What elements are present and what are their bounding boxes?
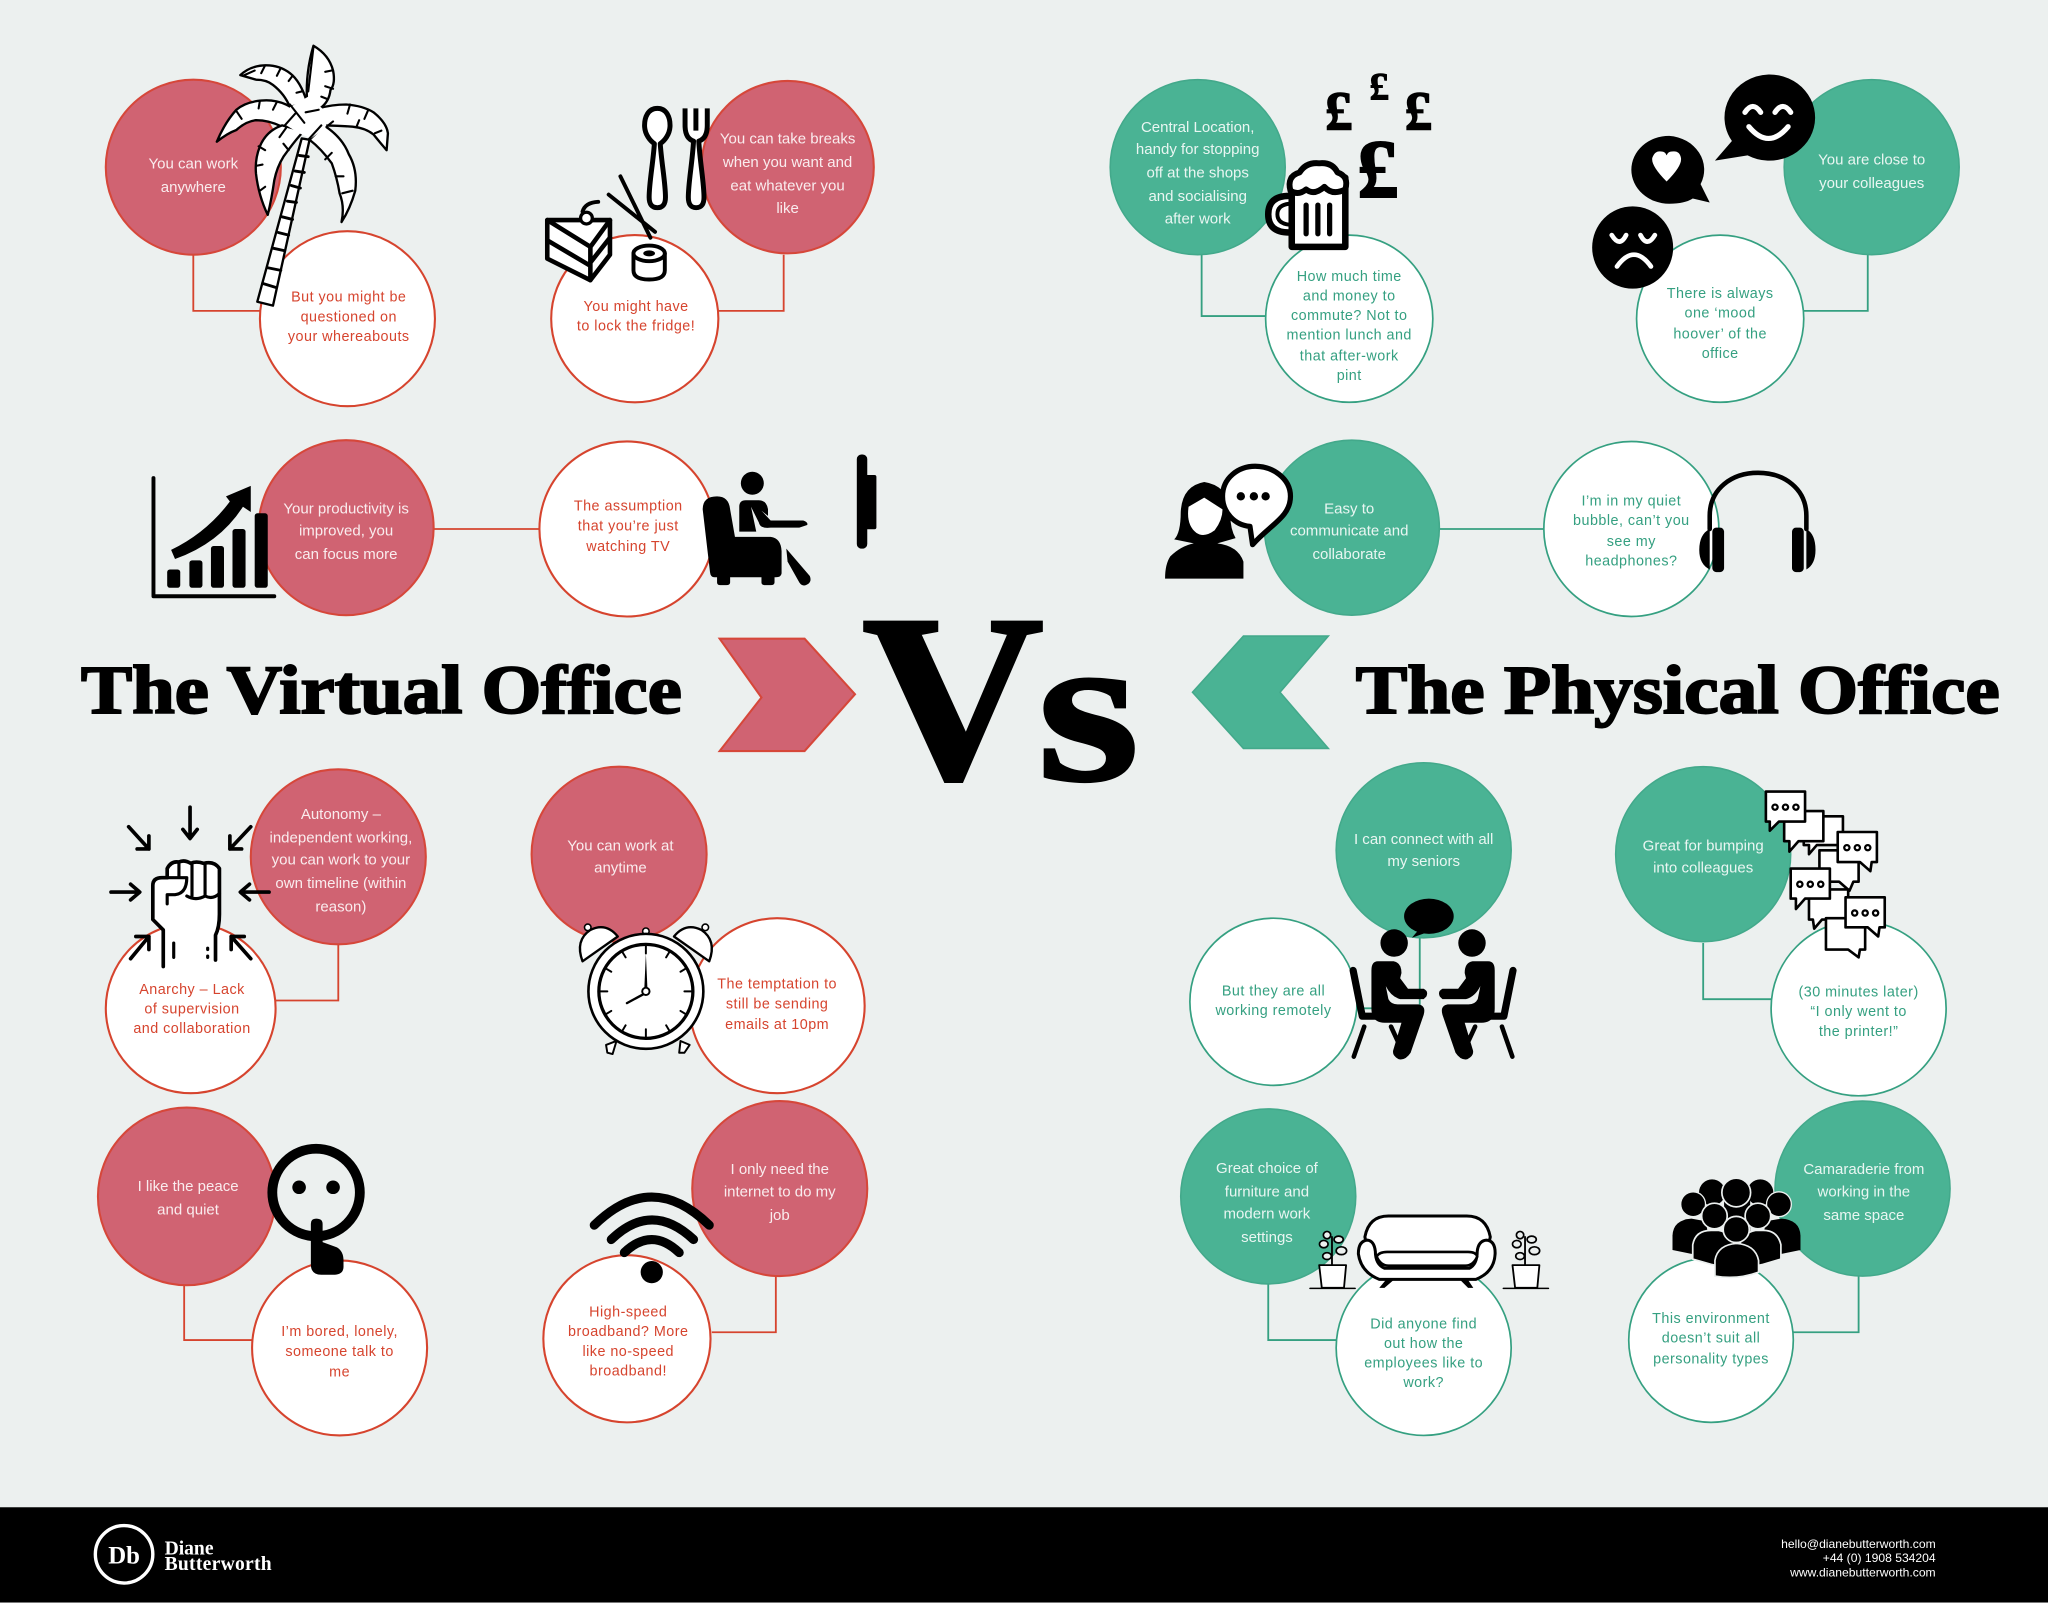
icon: palm tree: [217, 46, 388, 306]
panel: work anywhere: [106, 46, 435, 406]
benefit: furniture: [1181, 1109, 1356, 1284]
benefit: camaraderie: [1775, 1101, 1950, 1276]
benefit: seniors: my seniors: [1387, 853, 1460, 870]
benefit: work anywhere: You can work: [149, 155, 239, 172]
drawback: lonely: I’m bored, lonely,: [281, 1324, 398, 1340]
benefit: seniors: I can connect with all: [1354, 831, 1493, 848]
panel: close to colleagues: [1592, 74, 1959, 402]
icon: wifi: [594, 1197, 709, 1283]
icon: pound signs: £: [1369, 65, 1389, 108]
drawback: mood hoover: [1637, 235, 1804, 402]
drawback: commute: pint: [1337, 368, 1362, 384]
icon: shushing face: [272, 1149, 360, 1275]
drawback: broadband: High-speed: [589, 1305, 667, 1321]
benefit: quiet: I like the peace: [138, 1178, 239, 1195]
benefit: internet: internet to do my: [724, 1183, 836, 1200]
drawback: watching TV: that you’re just: [578, 518, 679, 534]
benefit: autonomy: own timeline (within: [275, 875, 406, 892]
logo: Diane: [165, 1538, 214, 1559]
panel: camaraderie: [1629, 1101, 1950, 1422]
icon: pound signs: [1325, 65, 1432, 215]
contact details: www.dianebutterworth.com: [1789, 1565, 1936, 1579]
logo: [95, 1526, 272, 1583]
icon: happy speech bubble: [1715, 74, 1815, 161]
benefit: autonomy: reason): [315, 899, 366, 916]
benefit: central location: after work: [1165, 210, 1231, 227]
drawback: broadband: [543, 1255, 711, 1422]
arrow: green chevron: [1192, 636, 1328, 748]
benefit: colleagues: [1784, 80, 1959, 255]
drawback: anarchy: of supervision: [144, 1002, 240, 1018]
drawback: remote: But they are all: [1222, 983, 1325, 999]
benefit: quiet: and quiet: [157, 1202, 220, 1219]
drawback: headphones bubble: [1544, 441, 1719, 616]
benefit: bumping: into colleagues: [1653, 859, 1753, 876]
icon: food and cutlery: [547, 108, 707, 280]
icon: growth chart: [153, 478, 274, 596]
benefit: breaks: You can take breaks: [720, 131, 855, 148]
drawback: commute: [1266, 235, 1433, 402]
drawback: printer: “I only went to: [1810, 1004, 1907, 1020]
drawback: commute: and money to: [1303, 288, 1396, 304]
benefit: productivity: Your productivity is: [283, 500, 409, 517]
icon: person in armchair with TV: [703, 455, 876, 585]
benefit: camaraderie: same space: [1823, 1207, 1904, 1224]
logo: Butterworth: [165, 1554, 272, 1575]
benefit: anytime: [532, 767, 707, 942]
benefit: communicate: [1264, 440, 1439, 615]
icon: overlapping chat bubbles: [1766, 792, 1885, 957]
panel: communicate: [1165, 440, 1816, 616]
benefit: central location: and socialising: [1148, 188, 1247, 205]
benefit: furniture: Great choice of: [1216, 1160, 1319, 1177]
drawback: fridge: You might have: [584, 299, 689, 315]
drawback: personality types: personality types: [1653, 1352, 1769, 1368]
drawback: broadband: broadband? More: [568, 1324, 688, 1340]
drawback: watching TV: The assumption: [574, 499, 683, 515]
benefit: breaks: [701, 81, 874, 253]
benefit: autonomy: you can work to your: [272, 852, 410, 869]
drawback: employees: work?: [1402, 1375, 1444, 1391]
drawback: fridge: to lock the fridge!: [577, 318, 695, 334]
drawback: whereabouts: [260, 231, 435, 406]
drawback: anarchy: Anarchy – Lack: [139, 982, 245, 998]
benefit: autonomy: independent working,: [270, 829, 412, 846]
drawback: remote: working remotely: [1214, 1003, 1332, 1019]
drawback: watching TV: [539, 441, 714, 616]
drawback: watching TV: watching TV: [585, 539, 670, 555]
drawback: commute: How much time: [1297, 269, 1402, 285]
drawback: late emails: emails at 10pm: [725, 1017, 829, 1033]
benefit: work anywhere: [106, 80, 281, 255]
panel: internet: [543, 1101, 867, 1422]
icon: group of people: [1672, 1178, 1800, 1277]
panel: peace and quiet: [98, 1108, 427, 1435]
benefit: seniors: [1336, 763, 1511, 938]
benefit: camaraderie: Camaraderie from: [1803, 1161, 1924, 1178]
icon: pound signs: £: [1357, 124, 1399, 215]
drawback: employees: [1336, 1260, 1511, 1435]
icon: plant left: [1310, 1231, 1355, 1288]
drawback: personality types: doesn’t suit all: [1662, 1331, 1760, 1347]
benefit: work anywhere: anywhere: [161, 179, 226, 196]
heading: The Physical Office: The Physical Office: [1356, 651, 2000, 728]
drawback: personality types: [1629, 1258, 1793, 1422]
heading: Vs: [862, 566, 1140, 829]
drawback: lonely: someone talk to: [285, 1344, 394, 1360]
benefit: internet: [692, 1101, 867, 1276]
drawback: lonely: me: [329, 1365, 350, 1381]
benefit: furniture: modern work: [1224, 1206, 1311, 1223]
benefit: colleagues: your colleagues: [1819, 175, 1924, 192]
icon: headphones: [1699, 473, 1816, 572]
drawback: printer: [1771, 921, 1946, 1096]
panel: productivity: [153, 440, 876, 616]
benefit: bumping: Great for bumping: [1643, 837, 1764, 854]
drawback: fridge: [551, 235, 718, 402]
panel: furniture: [1181, 1109, 1548, 1435]
drawback: whereabouts: But you might be: [291, 290, 406, 306]
panel: central location: [1110, 65, 1433, 402]
drawback: late emails: still be sending: [726, 996, 828, 1012]
panel: work anytime: [532, 767, 865, 1093]
icon: heart speech bubble: [1631, 136, 1710, 204]
benefit: colleagues: You are close to: [1818, 152, 1925, 169]
benefit: productivity: improved, you: [299, 523, 393, 540]
icon: alarm clock: [580, 924, 712, 1054]
drawback: personality types: This environment: [1652, 1311, 1770, 1327]
panel: autonomy: [106, 769, 426, 1093]
drawback: employees: Did anyone find: [1370, 1316, 1477, 1332]
drawback: broadband: like no-speed: [582, 1344, 674, 1360]
heading: The Virtual Office: The Virtual Office: [81, 651, 682, 728]
drawback: mood hoover: hoover’ of the: [1673, 326, 1767, 342]
benefit: central location: handy for stopping: [1136, 141, 1259, 158]
benefit: bumping: [1616, 767, 1791, 942]
arrow: red chevron: [720, 639, 855, 751]
drawback: whereabouts: questioned on: [301, 309, 397, 325]
drawback: headphones bubble: I’m in my quiet: [1582, 493, 1681, 509]
benefit: central location: [1110, 80, 1285, 255]
benefit: breaks: when you want and: [722, 154, 852, 171]
benefit: internet: I only need the: [730, 1161, 829, 1178]
benefit: internet: job: [769, 1207, 790, 1224]
benefit: central location: Central Location,: [1141, 119, 1254, 136]
benefit: communicate: communicate and: [1290, 523, 1408, 540]
drawback: mood hoover: one ‘mood: [1685, 305, 1756, 321]
drawback: broadband: broadband!: [590, 1363, 667, 1379]
panel: connect with seniors: [1190, 763, 1513, 1085]
benefit: productivity: [259, 440, 434, 615]
footer bar: [0, 1507, 2048, 1616]
benefit: communicate: collaborate: [1312, 546, 1386, 563]
benefit: quiet: [98, 1108, 276, 1285]
benefit: central location: off at the shops: [1147, 165, 1249, 182]
drawback: lonely: [252, 1260, 427, 1435]
icon: pound signs: £: [1405, 80, 1432, 141]
logo: Db: [108, 1542, 140, 1569]
drawback: whereabouts: your whereabouts: [288, 329, 410, 345]
drawback: printer: the printer!”: [1819, 1024, 1898, 1040]
drawback: commute: mention lunch and: [1287, 328, 1412, 344]
drawback: anarchy: [106, 923, 276, 1093]
benefit: anytime: anytime: [594, 859, 647, 876]
benefit: productivity: can focus more: [295, 546, 397, 563]
contact details: [1781, 1537, 1936, 1579]
drawback: late emails: [690, 918, 865, 1093]
benefit: autonomy: [251, 769, 426, 944]
contact details: hello@dianebutterworth.com: [1781, 1537, 1936, 1551]
benefit: furniture: furniture and: [1225, 1183, 1309, 1200]
heading: Vs: s: [1037, 589, 1140, 826]
drawback: mood hoover: office: [1702, 346, 1739, 362]
panel: take breaks: [547, 81, 874, 402]
drawback: employees: out how the: [1384, 1336, 1463, 1352]
benefit: furniture: settings: [1241, 1229, 1293, 1246]
panel: bumping into colleagues: [1616, 767, 1946, 1096]
drawback: headphones bubble: see my: [1607, 534, 1656, 550]
drawback: late emails: The temptation to: [717, 977, 837, 993]
icon: woman talking: [1165, 466, 1290, 579]
benefit: autonomy: Autonomy –: [301, 806, 382, 823]
icon: plant right: [1503, 1231, 1548, 1288]
icon: sofa: [1358, 1216, 1495, 1288]
benefit: anytime: You can work at: [567, 837, 674, 854]
benefit: communicate: Easy to: [1324, 500, 1374, 517]
contact details: +44 (0) 1908 534204: [1823, 1551, 1936, 1565]
icon: beer mug: [1268, 163, 1346, 247]
drawback: employees: employees like to: [1364, 1356, 1483, 1372]
icon: two people talking: [1353, 899, 1513, 1059]
benefit: breaks: eat whatever you: [730, 178, 845, 195]
drawback: commute: commute? Not to: [1291, 308, 1407, 324]
drawback: remote: [1190, 918, 1357, 1085]
drawback: headphones bubble: bubble, can’t you: [1573, 513, 1690, 529]
drawback: anarchy: and collaboration: [133, 1021, 251, 1037]
drawback: printer: (30 minutes later): [1799, 985, 1919, 1001]
benefit: camaraderie: working in the: [1817, 1183, 1910, 1200]
icon: raised fist with arrows: [111, 807, 269, 973]
benefit: breaks: like: [776, 200, 799, 217]
icon: pound signs: £: [1325, 80, 1352, 141]
icon: sad face: [1592, 206, 1673, 289]
drawback: mood hoover: There is always: [1667, 286, 1774, 302]
drawback: headphones bubble: headphones?: [1585, 554, 1677, 570]
heading: Vs: V: [862, 566, 1044, 829]
drawback: commute: that after-work: [1300, 348, 1399, 364]
